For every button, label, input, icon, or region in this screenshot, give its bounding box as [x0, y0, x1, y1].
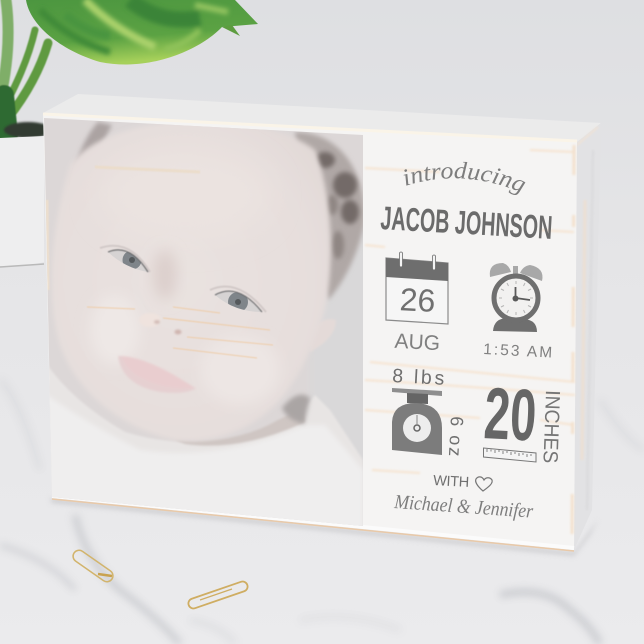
number: length 20: 20	[482, 373, 538, 457]
label: birth time: 1:53 AM	[483, 341, 553, 362]
label: INCHES: INCHES	[538, 390, 564, 464]
parents' names: Michael & Jennifer	[393, 491, 534, 523]
icon: calendar with date	[386, 252, 448, 324]
icon: kitchen scale	[392, 388, 442, 455]
label: weight pounds: 8 lbs	[392, 365, 445, 390]
plant pot	[0, 122, 52, 267]
plant stems	[0, 0, 48, 135]
label: AUG: AUG	[394, 330, 441, 355]
left eye	[100, 244, 150, 273]
icon: alarm clock	[490, 263, 542, 332]
plant leaf	[26, 0, 258, 64]
mouth	[118, 356, 197, 393]
right eye	[210, 286, 266, 313]
heading: introducing: introducing	[404, 162, 526, 195]
paper clip right	[187, 580, 249, 610]
wooden block	[43, 94, 601, 551]
nose	[154, 319, 182, 336]
block front face	[43, 113, 577, 550]
wooden block shadow	[50, 498, 598, 556]
baby photo	[40, 110, 370, 530]
icon: ruler	[484, 448, 536, 462]
block right side	[574, 123, 601, 550]
hair	[68, 122, 364, 300]
ear	[312, 320, 335, 349]
face	[52, 121, 331, 441]
paper clip left	[71, 548, 115, 584]
collar and shirt	[50, 368, 363, 468]
label: WITH: WITH	[433, 473, 470, 491]
icon: heart outline	[476, 477, 492, 491]
icon: calendar with date: 26	[399, 281, 436, 319]
wood grain lines on photo	[47, 167, 273, 358]
block top face	[43, 94, 601, 142]
neck shadow	[180, 416, 305, 446]
label: weight ounces: 6 oz	[445, 416, 467, 457]
